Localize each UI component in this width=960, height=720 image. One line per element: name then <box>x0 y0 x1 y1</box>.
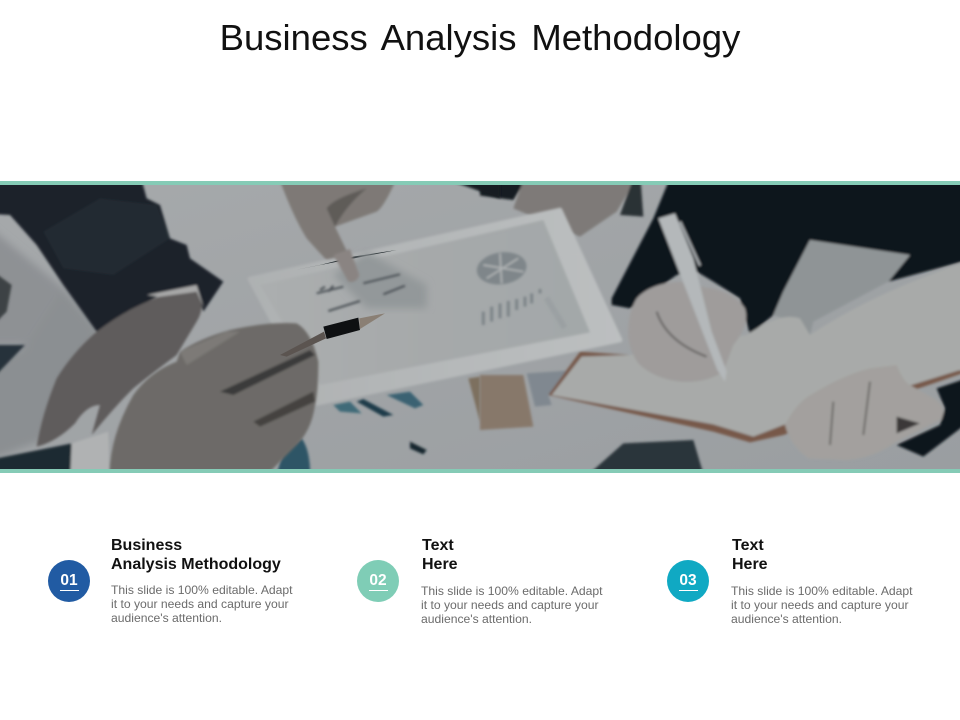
photo banner: business team analysing charts <box>0 181 960 473</box>
badge 03: 03 <box>679 572 697 589</box>
description 03: audience's attention. <box>731 612 842 626</box>
description 03: it to your needs and capture your <box>731 598 908 612</box>
badge 02: 02 <box>369 572 387 589</box>
holding hand <box>785 365 944 460</box>
heading 01 <box>111 537 281 573</box>
heading 02: Text <box>422 537 454 554</box>
bottom rule <box>0 469 960 473</box>
fountain pen <box>323 318 360 339</box>
table surface <box>0 185 960 469</box>
description 01: This slide is 100% editable. Adapt <box>111 583 293 597</box>
description 02: audience's attention. <box>421 612 532 626</box>
description 02: This slide is 100% editable. Adapt <box>421 584 603 598</box>
description 01: audience's attention. <box>111 611 222 625</box>
heading 03 <box>732 537 768 573</box>
finger tip <box>333 249 359 282</box>
writing hand <box>628 282 746 382</box>
tablet chart marks <box>317 274 405 311</box>
notebook pages <box>552 255 960 437</box>
notebook cover <box>548 352 960 442</box>
left half of photo <box>0 185 622 469</box>
description 03: This slide is 100% editable. Adapt <box>731 584 913 598</box>
pen <box>658 213 727 382</box>
description 01: it to your needs and capture your <box>111 597 288 611</box>
bar chart on tablet <box>483 289 540 325</box>
heading 03: Text <box>732 537 764 554</box>
finger <box>280 185 395 260</box>
item 03 <box>667 537 913 626</box>
heading 01: Analysis Methodology <box>111 556 281 573</box>
item 02 <box>357 537 603 626</box>
badge 01: 01 <box>60 572 78 589</box>
badge 03 <box>667 560 709 602</box>
sleeve <box>0 185 224 332</box>
heading 03: Here <box>732 556 768 573</box>
badge 01 <box>48 560 90 602</box>
pie chart on tablet <box>476 251 528 286</box>
description 03 <box>731 584 913 626</box>
heading 02 <box>422 537 458 573</box>
front hand <box>110 323 318 485</box>
back hand <box>37 292 202 447</box>
title: Business Analysis Methodology <box>220 17 740 58</box>
right half of photo: background, notebook and writer <box>478 185 960 469</box>
tablet screen <box>322 220 590 380</box>
jacket <box>612 162 960 334</box>
description 01 <box>111 583 293 625</box>
badge 02 <box>357 560 399 602</box>
description 02: it to your needs and capture your <box>421 598 598 612</box>
document charts <box>333 402 362 413</box>
tablet charts on the right half <box>475 249 565 328</box>
tablet body <box>250 210 620 403</box>
heading 01: Business <box>111 537 182 554</box>
description 02 <box>421 584 603 626</box>
heading 02: Here <box>422 556 458 573</box>
item 01 <box>48 537 293 625</box>
top rule <box>0 181 960 185</box>
